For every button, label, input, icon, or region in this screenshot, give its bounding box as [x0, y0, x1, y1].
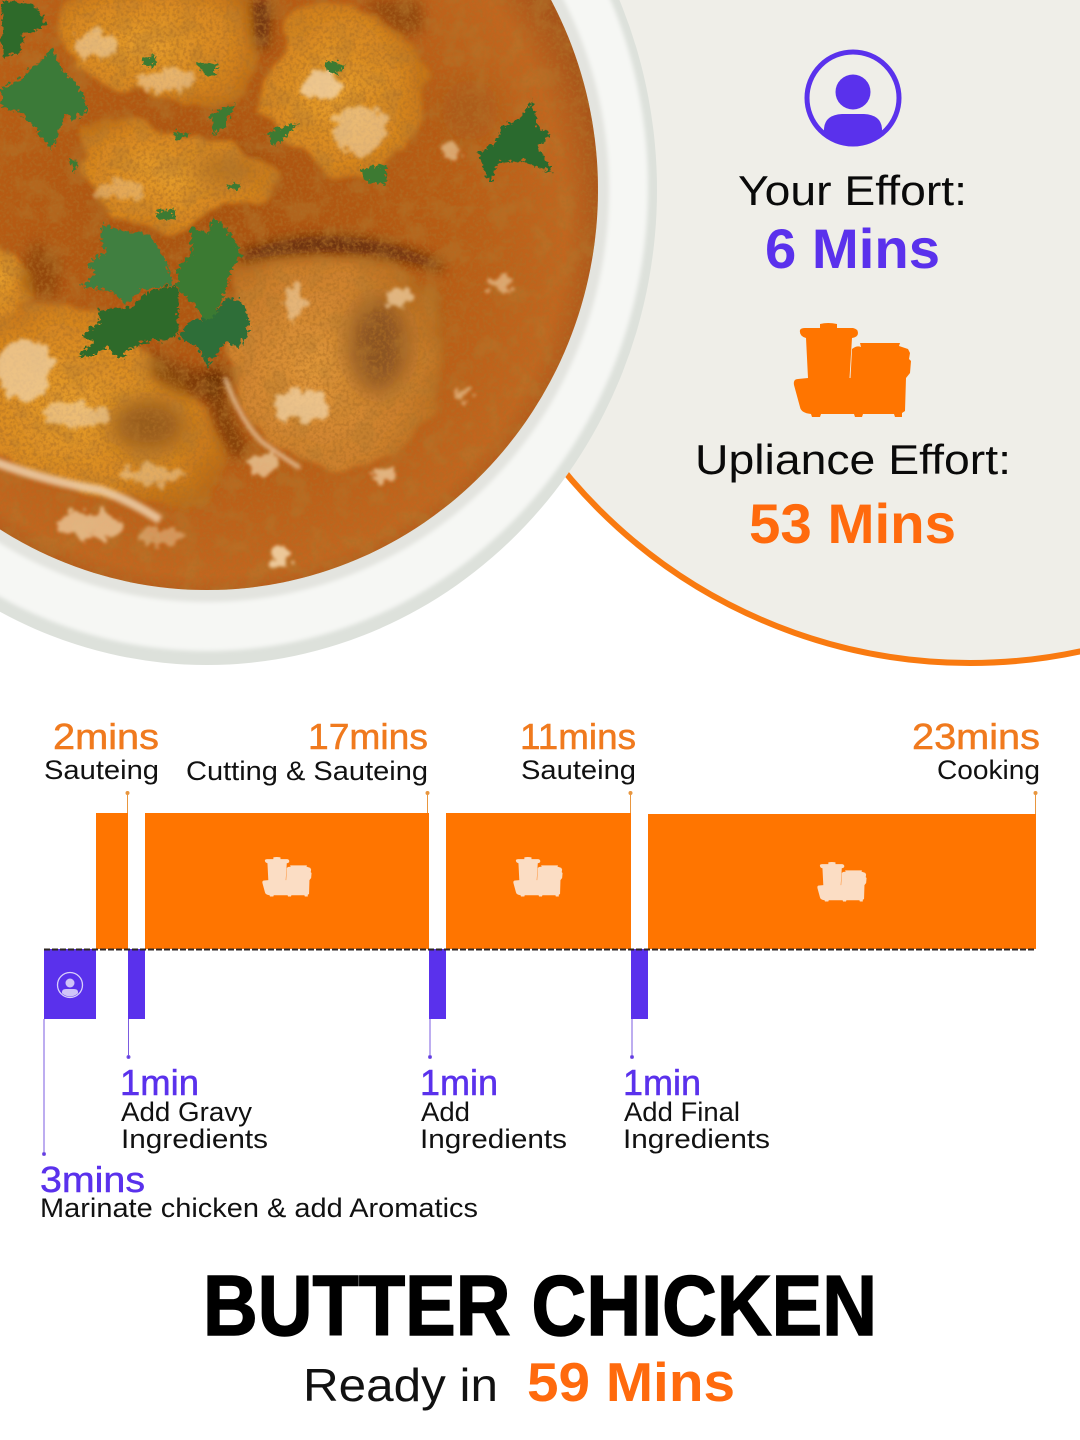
label: 2 mins sauteing [44, 716, 159, 785]
label: 17 mins cutting and sauteing: 17mins [308, 716, 428, 757]
label: 1 min add final ingredients: Ingredients [623, 1124, 770, 1154]
label: 1 min add gravy ingredients: Add Gravy [121, 1097, 253, 1127]
label: 17 mins cutting and sauteing [186, 716, 428, 786]
icon: appliance on bar 2 [262, 857, 312, 896]
dark crevices between pieces [21, 0, 443, 460]
cilantro leaves [0, 0, 552, 365]
label: 1 min add gravy ingredients: 1min [120, 1062, 199, 1103]
label: 3 mins marinate chicken: Marinate chicken & add Aromatics [40, 1193, 478, 1223]
label: 1 min add gravy ingredients [120, 1062, 268, 1154]
mottled colour [0, 0, 600, 600]
user bars [44, 949, 648, 1019]
label: 2 mins sauteing: 2mins [53, 716, 159, 757]
text: upliance effort value: 53 Mins [749, 492, 956, 555]
glossy highlights [0, 31, 512, 568]
icon: appliance on bar 3 [513, 857, 563, 896]
baseline [44, 948, 1036, 950]
label: 11 mins sauteing: Sauteing [521, 755, 636, 785]
brown patches on chicken [110, 80, 498, 451]
text: your effort label: Your Effort: [738, 167, 967, 214]
text: upliance effort label: Upliance Effort: [695, 436, 1011, 483]
label: 1 min add gravy ingredients: Ingredients [121, 1124, 268, 1154]
icon: user on purple bar [58, 972, 82, 998]
text: total time: 59 Mins [527, 1351, 735, 1413]
icon: user [807, 52, 899, 150]
panel: effort summary background circle [445, 0, 1080, 663]
label: 23 mins cooking [912, 716, 1040, 785]
timeline chart [42, 792, 1037, 1156]
icon: upliance appliance [794, 323, 911, 417]
icon: appliance on bar 4 [817, 862, 867, 901]
label: 1 min add ingredients: Add [421, 1097, 470, 1127]
text: ready in: Ready in [303, 1359, 498, 1411]
label: 1 min add ingredients: Ingredients [420, 1124, 567, 1154]
label: 11 mins sauteing: 11mins [520, 716, 636, 757]
purple leader lines [42, 1019, 634, 1156]
title: BUTTER CHICKEN [203, 1259, 877, 1354]
label: 1 min add final ingredients: Add Final [624, 1097, 740, 1127]
label: 1 min add final ingredients: 1min [623, 1062, 701, 1103]
label: 1 min add ingredients [420, 1062, 567, 1154]
label: 23 mins cooking: 23mins [912, 716, 1040, 757]
gravy texture [0, 0, 600, 600]
chicken pieces [0, 0, 448, 512]
label: 11 mins sauteing [520, 716, 636, 785]
bowl rim [0, 0, 657, 665]
upliance bars [96, 813, 1036, 949]
label: 1 min add final ingredients [623, 1062, 770, 1154]
label: 23 mins cooking: Cooking [937, 755, 1040, 785]
label: 3 mins marinate chicken: 3mins [40, 1159, 145, 1200]
label: 3 mins marinate chicken [40, 1159, 478, 1223]
sauce glaze streaks [0, 378, 300, 520]
orange leader lines [126, 792, 1037, 814]
image: bowl of butter chicken [0, 0, 657, 665]
label: 17 mins cutting and sauteing: Cutting & Sauteing [186, 756, 428, 786]
herb flecks [66, 54, 384, 218]
text: your effort value: 6 Mins [765, 217, 940, 280]
label: 2 mins sauteing: Sauteing [44, 755, 159, 785]
label: 1 min add ingredients: 1min [420, 1062, 498, 1103]
